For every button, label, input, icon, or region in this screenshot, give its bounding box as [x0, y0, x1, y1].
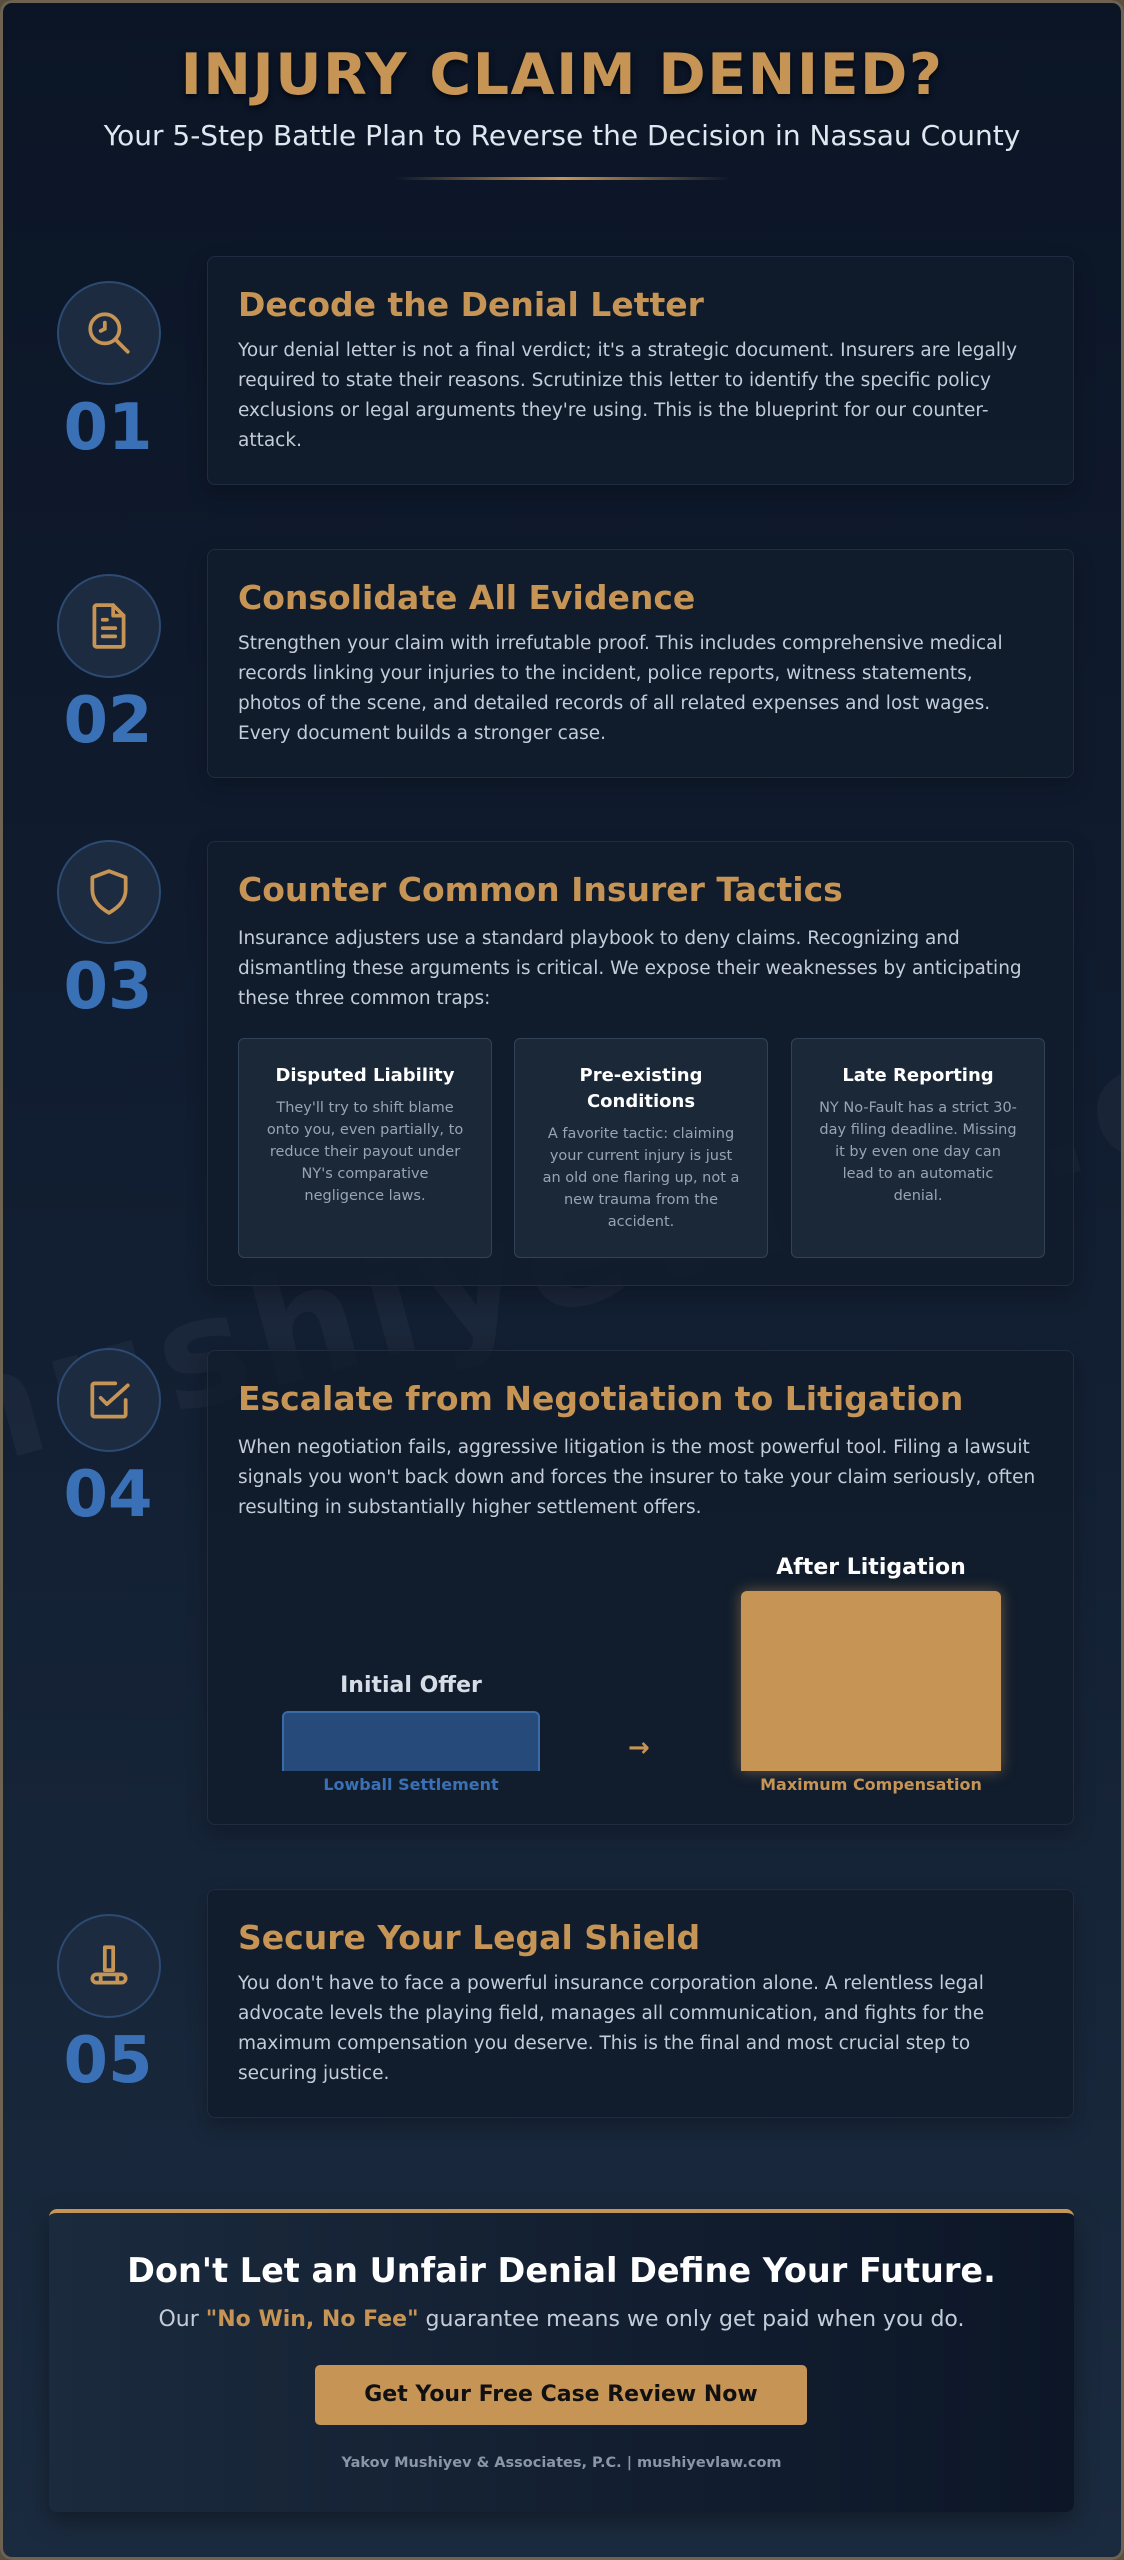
- text step 1: Your denial letter is not a final verdict; it's a strategic document. Insurers are legally required to state their reasons. Scrutinize this letter to identify the specific policy exclusions or legal arguments they're using. This is the blueprint for our counter-attack.: [238, 340, 1017, 451]
- label initial offer: Initial Offer: [340, 1673, 482, 1698]
- panel: step 5: [207, 1889, 1074, 2118]
- number 05: 05: [63, 2024, 153, 2098]
- arrow: →: [628, 1733, 650, 1763]
- label maximum: Maximum Compensation: [760, 1775, 982, 1794]
- heading step 5: Secure Your Legal Shield: [238, 1918, 700, 1957]
- button: Get Your Free Case Review Now: [364, 2382, 758, 2407]
- sub-card: late reporting: Late Reporting: [842, 1065, 994, 1086]
- sub-card: pre-existing conditions: [514, 1038, 768, 1258]
- panel: step 2: [207, 549, 1074, 778]
- bar maximum: [741, 1591, 1001, 1771]
- text step 2: Strengthen your claim with irrefutable proof. This includes comprehensive medical records linking your injuries to the incident, police reports, witness statements, photos of the scene, and detailed records of all related expenses and lost wages. Every document builds a stronger case.: [238, 633, 1003, 744]
- bar lowball: [282, 1711, 540, 1771]
- callout: CTA: [49, 2209, 1074, 2512]
- heading step 1: Decode the Denial Letter: [238, 285, 704, 324]
- panel: step 1: [207, 256, 1074, 485]
- number 03: 03: [63, 950, 153, 1024]
- heading step 3: Counter Common Insurer Tactics: [238, 870, 843, 909]
- icon: step 3 shield: [57, 840, 161, 944]
- icon: step 2 document: [57, 574, 161, 678]
- heading step 4: Escalate from Negotiation to Litigation: [238, 1379, 963, 1418]
- label after litigation: After Litigation: [776, 1555, 966, 1580]
- bar chart: [282, 1555, 1010, 1794]
- number 02: 02: [63, 684, 153, 758]
- text step 4: When negotiation fails, aggressive litigation is the most powerful tool. Filing a lawsuit signals you won't back down and forces the insurer to take your claim seriously, often resulting in substantially higher settlement offers.: [238, 1437, 1035, 1518]
- subtitle: Your 5-Step Battle Plan to Reverse the Decision in Nassau County: [104, 119, 1020, 152]
- sub-card: late reporting: NY No-Fault has a strict 30-day filing deadline. Missing it by even one day can lead to an automatic denial.: [819, 1100, 1017, 1204]
- number 04: 04: [63, 1458, 153, 1532]
- sub-card: pre-existing conditions: Pre-existing Conditions: [580, 1065, 702, 1112]
- icon: step 5 gavel: [57, 1914, 161, 2018]
- sub-card: late reporting: [791, 1038, 1045, 1258]
- CTA subtext: Our "No Win, No Fee" guarantee means we only get paid when you do.: [158, 2307, 964, 2332]
- panel: step 3: [207, 841, 1074, 1286]
- title: INJURY CLAIM DENIED?: [181, 42, 943, 108]
- sub-card: disputed liability: They'll try to shift blame onto you, even partially, to reduce their payout under NY's comparative negligence laws.: [267, 1100, 463, 1204]
- sub-card: disputed liability: [238, 1038, 492, 1258]
- icon: step 4 checkbox: [57, 1348, 161, 1452]
- sub-card: disputed liability: Disputed Liability: [275, 1065, 454, 1086]
- text step 5: You don't have to face a powerful insurance corporation alone. A relentless legal advocate levels the playing field, manages all communication, and fights for the maximum compensation you deserve. This is the final and most crucial step to securing justice.: [238, 1973, 984, 2084]
- footer: Yakov Mushiyev & Associates, P.C. | mushiyevlaw.com: [341, 2455, 782, 2471]
- panel: step 4: [207, 1350, 1074, 1825]
- heading step 2: Consolidate All Evidence: [238, 578, 695, 617]
- CTA heading: Don't Let an Unfair Denial Define Your Future.: [127, 2251, 996, 2290]
- button: [315, 2365, 807, 2425]
- text step 3: Insurance adjusters use a standard playbook to deny claims. Recognizing and dismantling these arguments is critical. We expose their weaknesses by anticipating these three common traps:: [238, 928, 1022, 1009]
- label lowball: Lowball Settlement: [323, 1775, 499, 1794]
- sub-card: pre-existing conditions: A favorite tactic: claiming your current injury is just an old one flaring up, not a new trauma from the accident.: [543, 1126, 739, 1230]
- number 01: 01: [63, 391, 153, 465]
- icon: step 1 magnifier: [57, 281, 161, 385]
